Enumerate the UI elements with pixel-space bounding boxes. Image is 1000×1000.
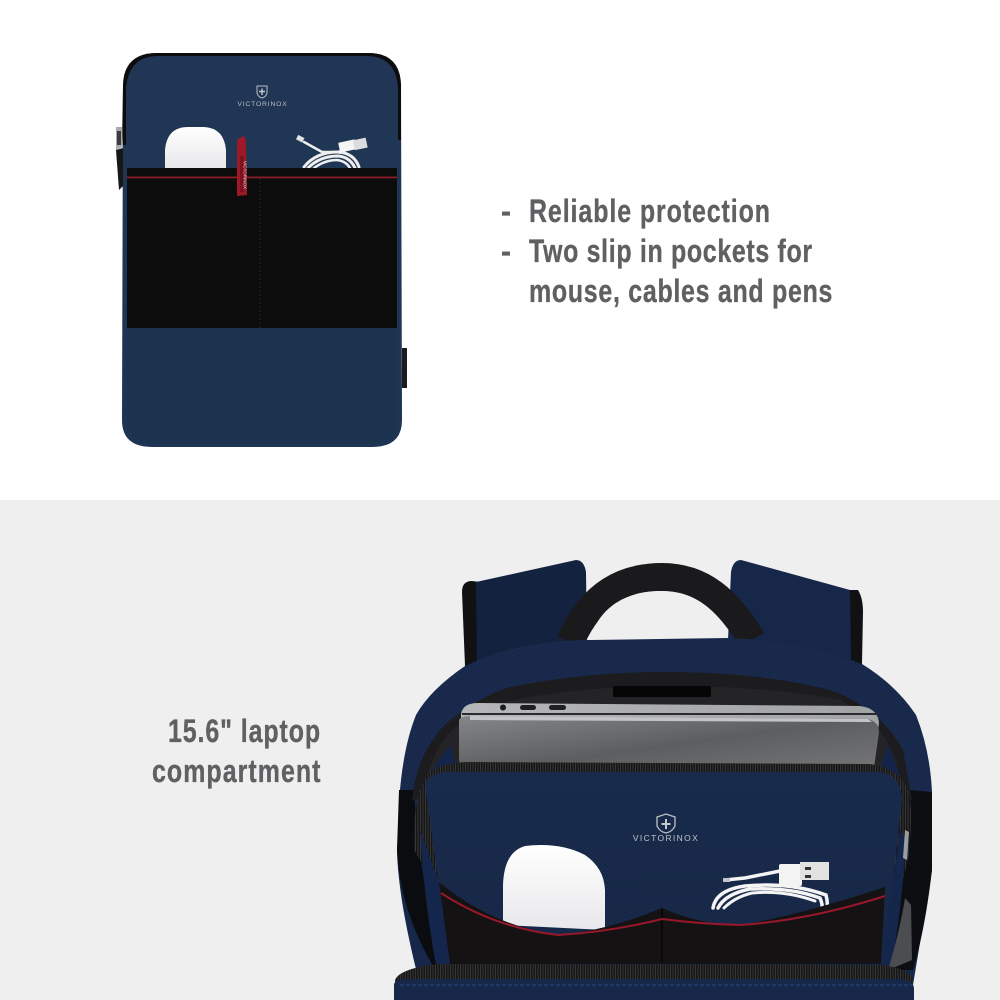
side zipper pull [903, 830, 909, 860]
sleeve black zip rim [122, 53, 401, 145]
sleeve black pocket [127, 168, 397, 328]
right shoulder strap [728, 560, 863, 664]
top carry handle [570, 577, 752, 642]
top panel background [0, 0, 1000, 500]
backpack red piping [441, 893, 885, 935]
laptop compartment caption [152, 714, 321, 790]
shell texture [400, 638, 932, 800]
backpack mouse [503, 845, 605, 930]
panel texture [425, 772, 902, 963]
sleeve mouse [165, 127, 226, 168]
bottom panel background [0, 500, 1000, 1000]
sleeve feature list: - [501, 193, 511, 229]
sleeve side tab [402, 348, 407, 388]
lower compartment stitching [400, 984, 912, 986]
sleeve cable [296, 135, 368, 168]
sleeve zipper pull [116, 127, 123, 190]
sleeve feature list: mouse, cables and pens [529, 274, 832, 310]
main opening zipper [412, 672, 912, 800]
sleeve feature list: Reliable protection [529, 194, 770, 230]
sleeve logo: VICTORINOX [237, 101, 288, 108]
lower zipper band [395, 964, 913, 985]
sleeve feature list: Two slip in pockets for [529, 234, 812, 270]
laptop slot notch [613, 686, 711, 697]
handle background gap [590, 591, 726, 641]
backpack cable [713, 862, 829, 910]
sleeve red piping [127, 176, 397, 178]
left shoulder strap [462, 560, 587, 668]
backpack product [394, 560, 932, 1000]
sleeve red pen: VICTORINOX [242, 161, 248, 189]
front organizer panel [425, 772, 902, 963]
laptop sleeve product [116, 53, 407, 447]
laptop compartment caption: compartment [152, 754, 321, 790]
sleeve feature list: - [501, 233, 511, 269]
sleeve body [122, 53, 402, 447]
backpack shell [397, 638, 932, 985]
glossy right side edge [890, 790, 932, 970]
interior dark lining [422, 686, 902, 800]
sleeve logo [237, 86, 288, 108]
pocket divider [259, 178, 261, 328]
mesh side pocket [888, 898, 912, 970]
backpack black pockets [439, 882, 885, 964]
backpack logo [633, 814, 699, 843]
lower front compartment [394, 979, 914, 1000]
laptop compartment caption: 15.6" laptop [168, 714, 320, 750]
sleeve lower panel [127, 328, 397, 444]
pocket divider seam [661, 908, 663, 963]
compartment zipper rim [414, 762, 911, 890]
backpack logo: VICTORINOX [633, 833, 699, 843]
sleeve red pen [237, 136, 248, 196]
sleeve feature list [501, 193, 832, 310]
navy side strips [420, 830, 906, 965]
glossy left side edge [397, 790, 450, 968]
laptop [459, 703, 879, 775]
interior navy slivers [428, 745, 900, 790]
